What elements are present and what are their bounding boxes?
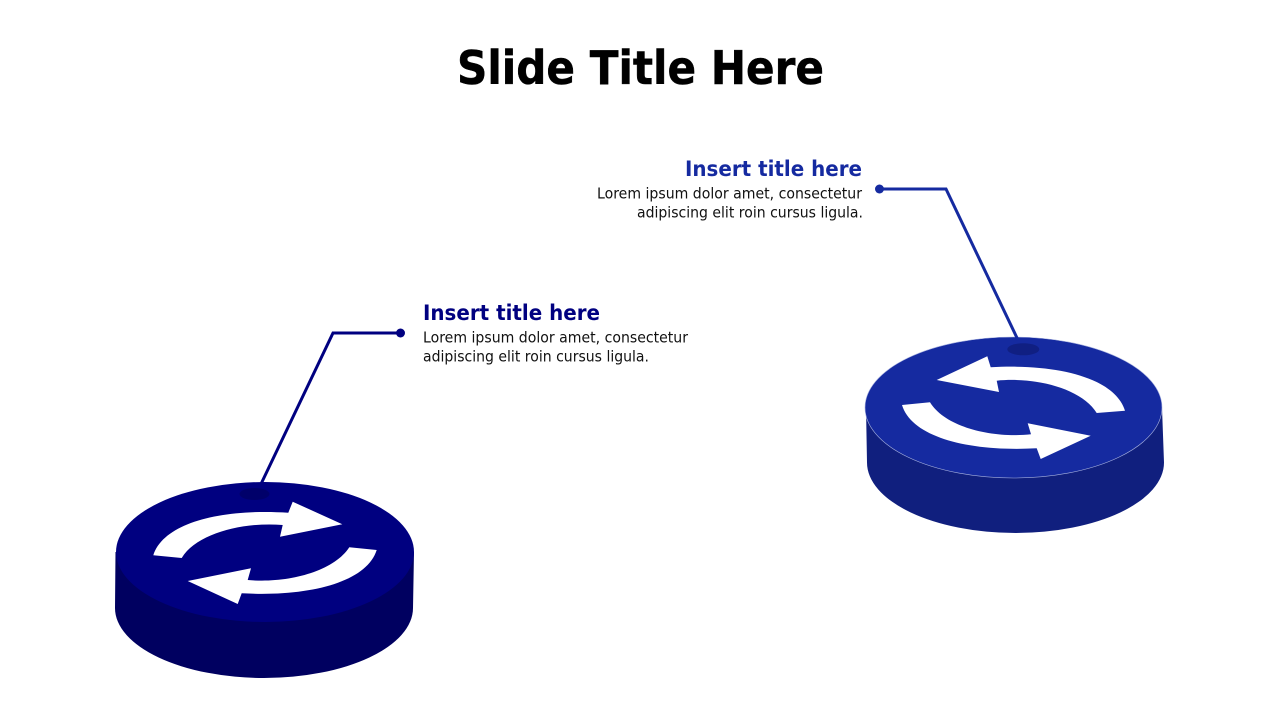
callout body: right: adipiscing elit roin cursus ligula.: [637, 204, 863, 222]
icon: right upper arrow: [937, 356, 1125, 413]
disc top: right: [865, 337, 1162, 478]
callout text: left: [423, 301, 689, 366]
callout body: left: adipiscing elit roin cursus ligula.: [423, 348, 649, 366]
icon: right lower arrow: [902, 402, 1091, 459]
callout body: left: [423, 328, 689, 366]
disc side: right: [866, 408, 1164, 533]
panel: left disc with callout: [115, 301, 689, 678]
icon: left upper arrow: [153, 502, 342, 558]
connector dot: left: [396, 328, 405, 338]
callout body: right: Lorem ipsum dolor amet, consectetur: [597, 184, 863, 202]
callout heading: left: Insert title here: [423, 301, 600, 325]
connector dot: right: [875, 184, 884, 194]
callout body: left: Lorem ipsum dolor amet, consectetur: [423, 328, 689, 346]
connector line: right: [879, 189, 1018, 340]
callout heading: right: Insert title here: [685, 157, 862, 181]
panel: right disc with callout: [597, 157, 1164, 533]
connector anchor: left: [240, 488, 270, 500]
connector line: left: [261, 333, 400, 484]
icon: left lower arrow: [188, 547, 377, 604]
disc top: left: [116, 482, 414, 622]
callout body: right: [597, 184, 863, 222]
disc side: left: [115, 552, 414, 678]
connector anchor: right: [1007, 343, 1039, 355]
callout text: right: [597, 157, 863, 222]
title: Slide Title Here: [457, 41, 824, 95]
